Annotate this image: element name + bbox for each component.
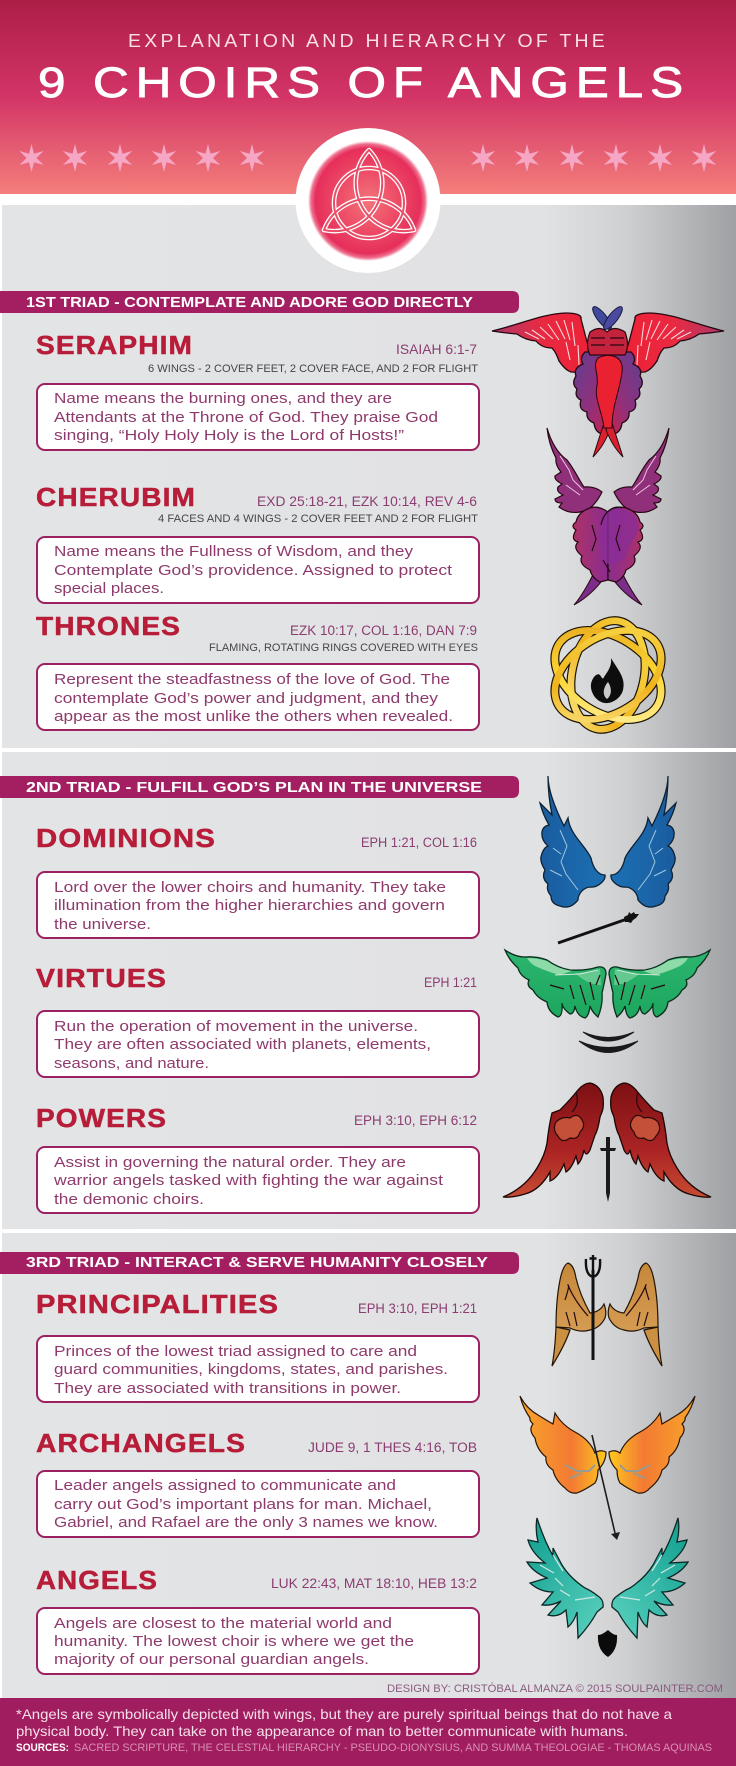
choir: Powers text: the demonic choirs. — [54, 1191, 204, 1208]
choir: Powers text: warrior angels tasked with fighting the war against — [53, 1172, 444, 1189]
choir: Principalities text — [36, 1291, 479, 1402]
choir: Powers text: EPH 3:10, EPH 6:12 — [354, 1113, 477, 1128]
icon: cherubim wings — [547, 428, 669, 605]
choir: Archangels text: ARCHANGELS — [36, 1430, 246, 1458]
choir: Archangels text: Leader angels assigned to communicate and — [54, 1477, 396, 1494]
choir: Archangels text: Gabriel, and Rafael are the only 3 names we know. — [54, 1514, 438, 1531]
choir: Dominions text: the universe. — [54, 916, 151, 933]
choir: Dominions text: illumination from the higher hierarchies and govern — [54, 897, 445, 914]
stars row left — [19, 144, 264, 172]
choir: Angels text — [36, 1567, 479, 1674]
choir: Principalities text: Princes of the lowest triad assigned to care and — [54, 1343, 417, 1360]
choir: Angels text: majority of our personal guardian angels. — [54, 1651, 369, 1668]
choir: Seraphim text: singing, “Holy Holy Holy is the Lord of Hosts!” — [54, 427, 404, 444]
choir: Cherubim text: Name means the Fullness of Wisdom, and they — [54, 543, 413, 560]
choir: Principalities text: guard communities, kingdoms, states, and parishes. — [54, 1361, 448, 1378]
icon: dominions wings and scepter — [540, 776, 676, 943]
choir: Seraphim text: Name means the burning ones, and they are — [54, 390, 392, 407]
choir: Thrones text: THRONES — [36, 613, 181, 641]
choir: Virtues text: EPH 1:21 — [424, 975, 477, 990]
choir: Powers text: POWERS — [36, 1105, 167, 1133]
choir: Thrones text: appear as the most unlike the others when revealed. — [54, 708, 453, 725]
choir: Virtues text: seasons, and nature. — [54, 1055, 209, 1072]
icon: archangels wings and arrow — [520, 1396, 695, 1540]
choir: Thrones text: EZK 10:17, COL 1:16, DAN 7:9 — [290, 623, 477, 638]
footer band — [0, 1698, 736, 1766]
sources: SOURCES: — [16, 1742, 69, 1754]
triad bar 2: 2ND TRIAD - FULFILL GOD’S PLAN IN THE UNIVERSE — [26, 779, 482, 796]
choir: Archangels text: JUDE 9, 1 THES 4:16, TOB — [308, 1440, 477, 1455]
icon: seraphim six wings — [492, 304, 724, 457]
choir: Archangels text: carry out God’s important plans for man. Michael, — [54, 1496, 432, 1513]
choir: Thrones text: Represent the steadfastness of the love of God. The — [54, 671, 450, 688]
icon: angels wings and shield — [527, 1518, 688, 1657]
choir: Powers text — [36, 1105, 479, 1213]
choir: Virtues text — [36, 965, 479, 1077]
header band — [0, 0, 736, 194]
choir: Cherubim text: CHERUBIM — [36, 484, 196, 512]
choir: Dominions text: DOMINIONS — [36, 825, 216, 853]
choir: Principalities text: They are associated with transitions in power. — [54, 1380, 401, 1397]
triad bar 3 — [0, 1252, 519, 1274]
panel: second triad background — [2, 752, 736, 1229]
design credit: DESIGN BY: CRISTÓBAL ALMANZA © 2015 SOULPAINTER.COM — [387, 1682, 723, 1695]
icon: principalities wings and trident — [552, 1255, 662, 1366]
emblem: trinity knot medallion — [296, 128, 440, 273]
footnote: *Angels are symbolically depicted with wings, but they are purely spiritual beings that do not have a — [16, 1706, 672, 1722]
choir: Seraphim text — [36, 332, 479, 450]
choir: Angels text: Angels are closest to the material world and — [54, 1615, 392, 1632]
icon: thrones rings and flame — [539, 612, 677, 738]
choir: Archangels text — [36, 1430, 479, 1537]
choir: Virtues text: They are often associated with planets, elements, — [54, 1036, 431, 1053]
choir: Seraphim text: ISAIAH 6:1-7 — [396, 342, 477, 357]
choir: Cherubim text: Contemplate God’s providence. Assigned to protect — [54, 562, 453, 579]
choir: Seraphim text: 6 WINGS - 2 COVER FEET, 2 COVER FACE, AND 2 FOR FLIGHT — [148, 363, 478, 375]
footnote — [16, 1706, 672, 1739]
choir: Cherubim text: EXD 25:18-21, EZK 10:14, REV 4-6 — [257, 494, 477, 509]
choir: Thrones text: FLAMING, ROTATING RINGS COVERED WITH EYES — [209, 642, 478, 654]
choir: Angels text: ANGELS — [36, 1567, 158, 1595]
choir: Angels text: LUK 22:43, MAT 18:10, HEB 13:2 — [271, 1576, 477, 1591]
choir: Dominions text — [36, 825, 479, 938]
subtitle: EXPLANATION AND HIERARCHY OF THE — [128, 31, 608, 51]
choir: Seraphim text: SERAPHIM — [36, 332, 193, 360]
choir: Thrones text — [36, 613, 479, 730]
choir: Seraphim text: Attendants at the Throne of God. They praise God — [54, 409, 438, 426]
triad bar 3: 3RD TRIAD - INTERACT & SERVE HUMANITY CLOSELY — [26, 1254, 488, 1271]
choir: Powers text: Assist in governing the natural order. They are — [54, 1154, 406, 1171]
title: 9 CHOIRS OF ANGELS — [38, 59, 690, 107]
choir: Angels text: humanity. The lowest choir is where we get the — [54, 1633, 414, 1650]
choir: Virtues text: Run the operation of movement in the universe. — [54, 1018, 418, 1035]
icon: virtues wings and crescents — [505, 950, 710, 1052]
footnote: physical body. They can take on the appearance of man to better communicate with humans. — [16, 1723, 628, 1739]
triad bar 1: 1ST TRIAD - CONTEMPLATE AND ADORE GOD DIRECTLY — [26, 294, 473, 311]
choir: Dominions text: EPH 1:21, COL 1:16 — [361, 835, 477, 850]
choir: Virtues text: VIRTUES — [36, 965, 167, 993]
choir: Principalities text: PRINCIPALITIES — [36, 1291, 279, 1319]
panel: third triad background — [2, 1233, 736, 1698]
stars row right — [471, 144, 716, 172]
choir: Thrones text: contemplate God’s power and judgment, and they — [54, 690, 438, 707]
choir: Cherubim text — [36, 484, 479, 603]
choir: Cherubim text: 4 FACES AND 4 WINGS - 2 COVER FEET AND 2 FOR FLIGHT — [158, 513, 478, 525]
choir: Cherubim text: special places. — [54, 580, 164, 597]
choir: Principalities text: EPH 3:10, EPH 1:21 — [358, 1301, 477, 1316]
choir: Dominions text: Lord over the lower choirs and humanity. They take — [54, 879, 446, 896]
icon: powers wings and sword — [503, 1083, 711, 1202]
triad bar 2 — [0, 776, 519, 798]
sources: SACRED SCRIPTURE, THE CELESTIAL HIERARCHY - PSEUDO-DIONYSIUS, AND SUMMA THEOLOGIAE - THOMAS AQUINAS — [74, 1742, 712, 1754]
triad bar 1 — [0, 291, 519, 313]
panel: first triad background — [2, 205, 736, 748]
